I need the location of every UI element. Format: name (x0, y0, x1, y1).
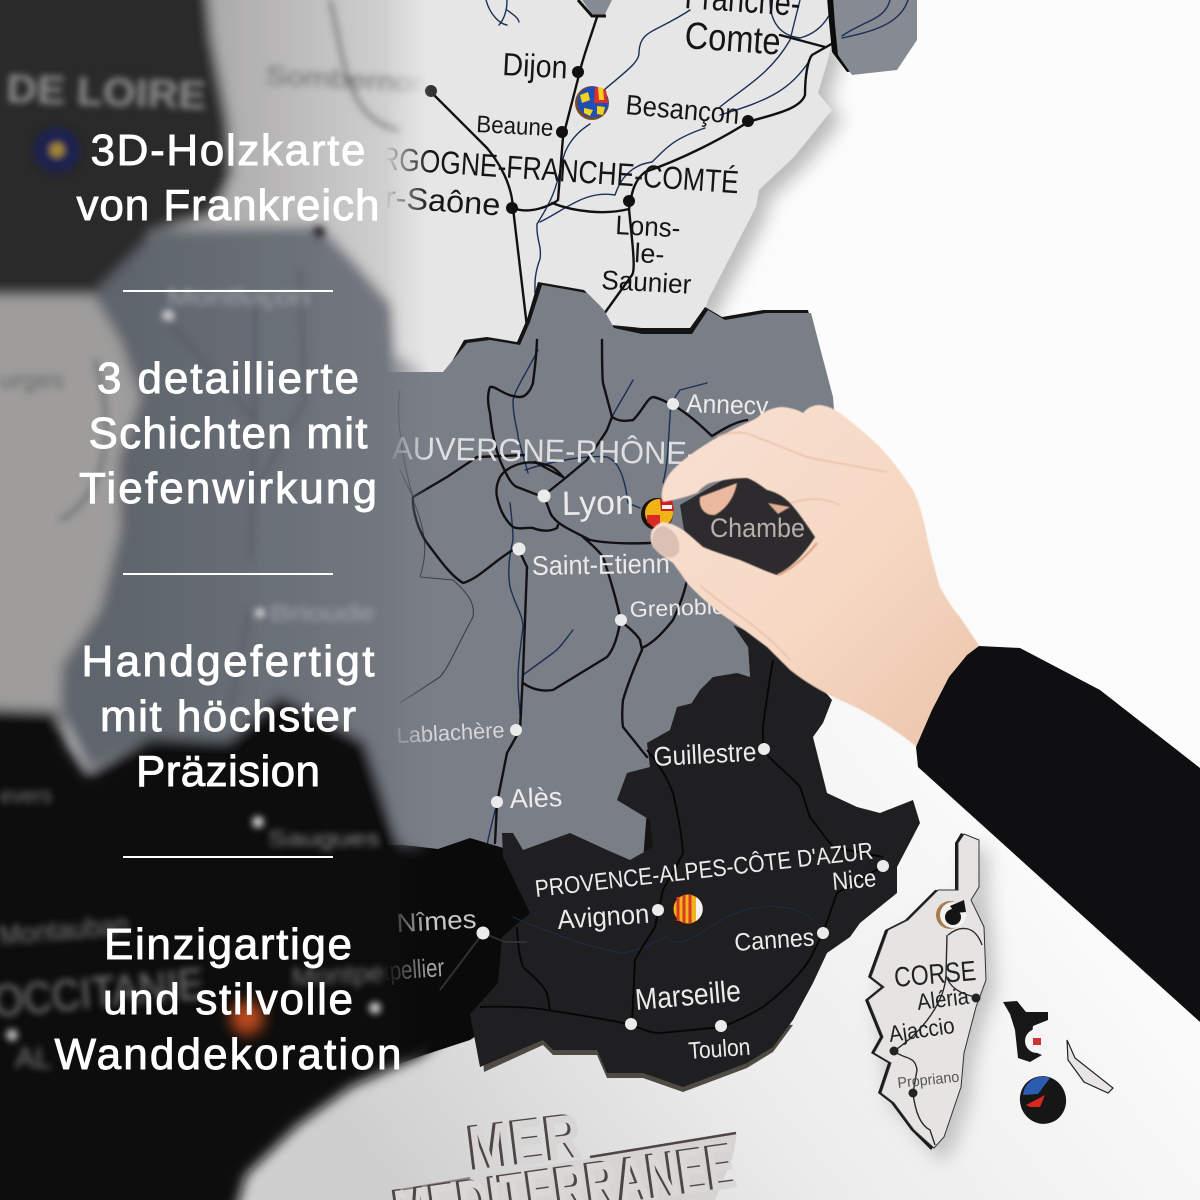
finger creases and shading (700, 433, 887, 660)
caption: handmade (82, 637, 374, 796)
blurred dark region, top left (0, 0, 232, 295)
caption: three layers (79, 354, 377, 513)
caption: handmade: Handgefertigt (82, 637, 374, 686)
rivers and roads: Provence (440, 660, 883, 1033)
shadow of light region on wall (706, 46, 848, 317)
middle finger behind (700, 483, 737, 515)
Mer Méditerranée wood lettering: MER (462, 1099, 583, 1184)
caption: unique decoration (54, 920, 402, 1079)
caption: three layers: Tiefenwirkung (79, 464, 377, 513)
labels and city markers: Bourgogne: Besançon (624, 89, 741, 130)
labels and city markers: Provence: Montpellier (343, 952, 445, 989)
Corsica island (865, 833, 995, 1162)
labels and city markers: Provence: Cannes (733, 923, 815, 957)
blurred light region, top (157, 0, 480, 390)
caption: three layers: 3 detaillierte (97, 354, 359, 403)
blurred background labels: Saugues (268, 826, 380, 851)
labels and city markers: Provence: Avignon (556, 899, 650, 935)
blurred background labels: Montpe (291, 957, 385, 992)
labels and city markers: Annecy (686, 388, 769, 421)
thumbnail (652, 526, 679, 558)
labels and city markers: Provence: Nice (831, 864, 877, 896)
blurred background labels (0, 0, 431, 1075)
hand (651, 405, 980, 747)
caption: unique decoration: Einzigartige (104, 920, 352, 969)
blurred background labels: AL (15, 1042, 52, 1075)
divider 2 (123, 573, 333, 575)
labels and city markers: Bourgogne: Lons- (615, 210, 681, 243)
labels and city markers: Bourgogne: sur-Saône (350, 177, 502, 222)
small islet (1067, 1040, 1113, 1093)
labels and city markers: Bourgogne: Comte (683, 15, 782, 64)
blurred light region, left (0, 295, 140, 730)
blurred background labels: Brioude (270, 600, 375, 627)
overseas territory pieces (1003, 1001, 1113, 1130)
labels and city markers: Provence: Marseille (634, 975, 742, 1017)
caption: 3D wood map (76, 126, 380, 230)
palm fold (778, 543, 817, 575)
shadow (877, 845, 995, 1162)
region shape: Bourgogne-Franche-Comté (388, 0, 832, 372)
dark gap under the hand with city label (680, 470, 830, 590)
labels: Aléria (915, 983, 970, 1015)
blurred black region, bottom left (0, 696, 530, 1200)
rivers (482, 350, 707, 880)
caption: unique decoration: Wanddekoration (54, 1030, 402, 1079)
caption: unique decoration: und stilvolle (103, 975, 353, 1024)
roads and rivers (894, 928, 982, 1145)
labels and city markers: AUVERGNE-RHÔNE- (392, 430, 697, 471)
Mer Méditerranée wood lettering: MER (465, 1100, 586, 1185)
rivers: Bourgogne (486, 0, 835, 293)
labels and city markers: Bourgogne: BOURGOGNE-FRANCHE-COMTÉ (322, 136, 740, 200)
roads (413, 340, 747, 843)
blurred background labels: Montauban (0, 909, 130, 951)
blurred background labels: Montluçon (167, 284, 310, 311)
blurred background labels: DE LOIRE (6, 67, 207, 118)
blurred orange pin (230, 1001, 264, 1035)
labels and city markers: Bourgogne: Beaune (476, 111, 554, 142)
roads: Bourgogne (432, 17, 842, 327)
region: Provence-Alpes-Côte d'Azur (black) (343, 625, 920, 1092)
labels and city markers: Provence (343, 737, 889, 1065)
region shape: Auvergne-Rhône-Alpes (388, 285, 834, 860)
sharp map fading into the blurred foreground (387, 0, 920, 1092)
island wood edge (865, 833, 983, 1150)
wood layer edge (446, 282, 828, 900)
blurred background labels: evers (0, 783, 52, 808)
caption: handmade: mit höchster (100, 692, 356, 741)
labels and city markers: Lyon (561, 484, 634, 523)
caption: 3D wood map: von Frankreich (76, 181, 380, 230)
labels and city markers: Bourgogne (387, 0, 800, 294)
blurred grey region (60, 226, 470, 850)
island shape (868, 834, 986, 1148)
pin: Lyon flag held by the fingers (641, 498, 674, 530)
labels and city markers: Bourgogne: le- (634, 238, 665, 270)
pin: Bourgogne flag (575, 86, 609, 120)
divider 1 (123, 290, 333, 292)
caption: handmade: Präzision (136, 747, 320, 796)
blurred background labels: urges (0, 367, 64, 394)
top-right grey region (578, 0, 917, 75)
palm, index finger and thumb (651, 405, 980, 747)
labels and city markers: Provence: Guillestre (653, 737, 757, 772)
blurred background map regions (0, 0, 530, 1200)
labels and city markers: Provence: PROVENCE-ALPES-CÔTE D'AZUR (534, 837, 874, 903)
blurred background labels: Sombernon (265, 60, 431, 99)
labels and city markers (392, 388, 769, 814)
pin: Provence flag (671, 894, 703, 926)
caption: 3D wood map: 3D-Holzkarte (90, 126, 366, 175)
dark gap under the hand with city label: Chambe (710, 513, 805, 543)
wood layer edge (484, 1024, 793, 1092)
labels and city markers: Grenoble (629, 594, 725, 622)
labels and city markers: Lablachère (396, 717, 505, 748)
Mayotte piece (1003, 1001, 1049, 1062)
labels: CORSE (893, 955, 977, 993)
labels and city markers: Provence: Toulon (688, 1034, 751, 1065)
sleeve (916, 646, 1200, 1022)
labels and city markers: Alès (509, 782, 563, 814)
ring finger peek (768, 503, 790, 514)
labels and city markers: Bourgogne: Saunier (601, 265, 692, 300)
labels (887, 955, 980, 1098)
caption: three layers: Schichten mit (88, 409, 368, 458)
La Réunion piece (1013, 1070, 1073, 1130)
labels and city markers: Bourgogne: Dijon (502, 46, 568, 85)
pin: Corsica flag (936, 900, 966, 929)
region: Auvergne-Rhône-Alpes (grey) (388, 282, 834, 860)
divider 3 (123, 856, 333, 858)
labels: Propriano (897, 1069, 960, 1092)
labels and city markers: Saint-Etienn (532, 549, 670, 581)
Mer Méditerranée wood lettering (387, 1099, 741, 1200)
labels and city markers: Provence: Nîmes (396, 904, 477, 938)
region: Occitanie (black, sharp part) (370, 838, 530, 1075)
thin faded river line (399, 390, 473, 703)
region shape: Provence (470, 625, 920, 1087)
labels: Ajaccio (887, 1012, 956, 1047)
